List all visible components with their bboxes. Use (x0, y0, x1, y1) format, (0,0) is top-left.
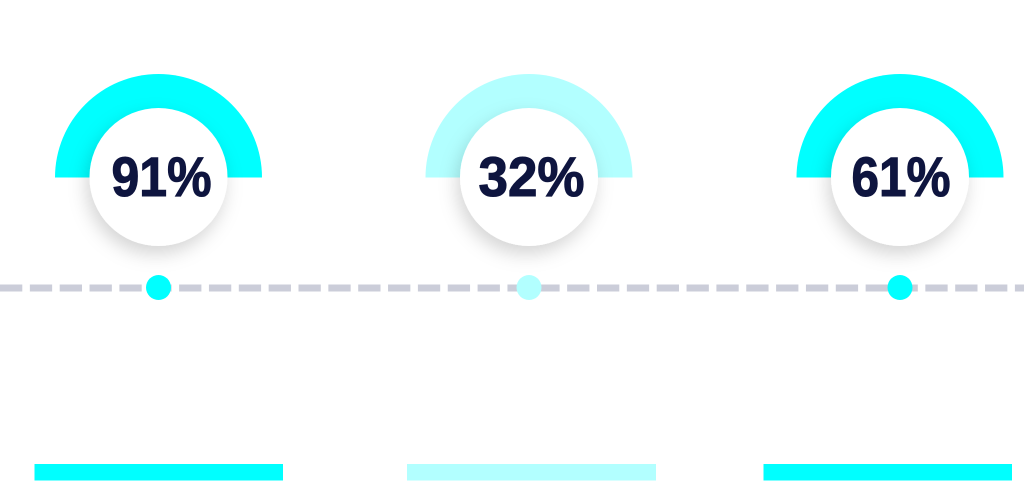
timeline marker 2 (516, 275, 542, 300)
gauge: 32% (426, 74, 632, 246)
bar 1 (34, 464, 283, 480)
timeline marker 3 (888, 275, 912, 300)
gauge: 32%: 32% (478, 145, 584, 208)
bar 2 (407, 464, 656, 480)
timeline marker 1 (146, 275, 171, 300)
gauge: 61%: 61% (852, 145, 950, 208)
gauge: 91% (55, 74, 262, 246)
gauge: 91%: 91% (112, 145, 212, 208)
bar 3 (764, 464, 1012, 480)
gauge: 61% (796, 74, 1004, 246)
